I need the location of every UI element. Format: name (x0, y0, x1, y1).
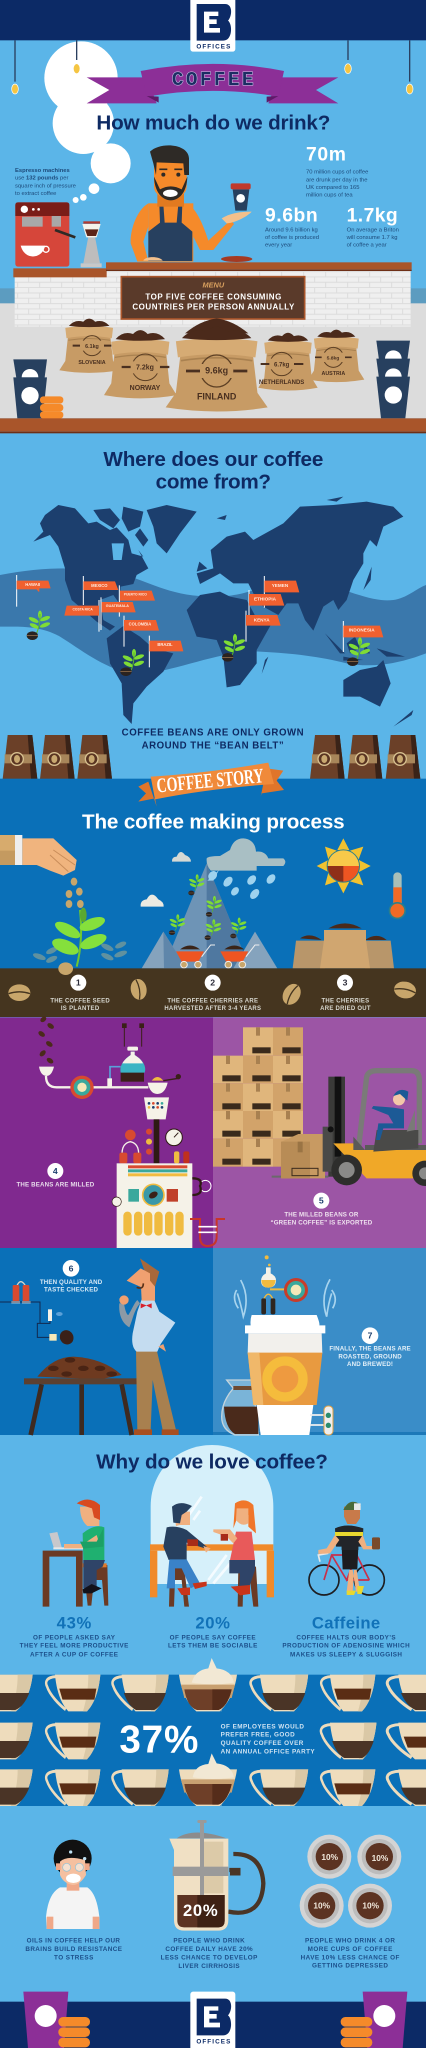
step 2: THE COFFEE CHERRIES ARE (167, 998, 258, 1004)
panel: steps 6 and 7 (0, 1248, 426, 1435)
flags (17, 575, 383, 667)
step 7: FINALLY, THE BEANS ARE (329, 1346, 411, 1353)
stat: 20%: LETS THEM BE SOCIABLE (168, 1643, 257, 1650)
panel background (0, 1017, 426, 1248)
fact: depression: MORE CUPS OF COFFEE (308, 1946, 392, 1953)
heading: where does our coffee (103, 448, 323, 493)
espresso fact: use 132 pounds per (15, 176, 69, 182)
stat: 37 percent: AN ANNUAL OFFICE PARTY (221, 1748, 315, 1755)
fact: depression: HAVE 10% LESS CHANCE OF (301, 1954, 399, 1961)
illustration: stressed person (46, 1840, 99, 1929)
flags: HAWAII (25, 582, 40, 587)
sack: netherlands (258, 333, 318, 391)
icon: taster man (119, 1258, 179, 1435)
fact: oils in coffee: TO STRESS (54, 1954, 93, 1961)
stat: 1.7kg: will consume 1.7 kg (346, 235, 398, 241)
stat: 1.7kg (346, 206, 399, 249)
stat: 37 percent: OF EMPLOYEES WOULD (221, 1723, 304, 1730)
icon: thermometer (389, 872, 406, 919)
cups row 1 (0, 1658, 426, 1711)
sack: norway: NORWAY (130, 385, 161, 392)
step 3: ARE DRIED OUT (320, 1006, 371, 1012)
stat: 9.6bn: 9.6bn (265, 206, 318, 227)
coffee bags (3, 735, 420, 779)
fact: liver cirrhosis: COFFEE DAILY HAVE 20% (165, 1946, 253, 1953)
icon: stacked boxes (213, 1027, 303, 1167)
step 3 (320, 975, 371, 1012)
step 6 (40, 1260, 103, 1294)
fact: liver cirrhosis: LIVER CIRRHOSIS (178, 1963, 240, 1970)
stat: 1.7kg: 1.7kg (347, 206, 398, 227)
footer bar (0, 2002, 426, 2048)
illustration: cyclist (309, 1502, 384, 1595)
icon: falling seeds (66, 878, 84, 908)
ribbon: coffee story (138, 763, 284, 807)
stat: caffeine: PRODUCTION OF ADENOSINE WHICH (282, 1643, 410, 1650)
caption: bean belt: AROUND THE “BEAN BELT” (142, 740, 284, 751)
sack: norway: 7.2kg (136, 364, 154, 371)
step 1: THE COFFEE SEED (50, 998, 110, 1004)
bean belt band (0, 568, 426, 674)
icon: hand planting (0, 835, 77, 876)
stat: 43%: OF PEOPLE ASKED SAY (33, 1634, 116, 1641)
icon: footer cup right (341, 1992, 407, 2048)
ribbon: coffee story: COFFEE STORY (156, 765, 265, 797)
step 6: THEN QUALITY AND (40, 1279, 103, 1286)
icon: sacks (293, 923, 394, 968)
panel: coffee story (0, 763, 426, 1017)
fact: depression: PEOPLE WHO DRINK 4 OR (305, 1938, 395, 1945)
flags: YEMEN (272, 583, 289, 588)
illustration: coffee cups from above: 10% (372, 1853, 389, 1863)
stat: 43%: AFTER A CUP OF COFFEE (30, 1651, 118, 1658)
soil strip with steps 1-3 (0, 962, 426, 1017)
step 7: AND BREWED! (347, 1361, 393, 1368)
icon: clouds and rain (141, 838, 285, 907)
icon: takeaway cups right (376, 341, 410, 418)
heading: why do we love coffee: Why do we love coffee? (96, 1450, 328, 1473)
panel: steps 4 and 5 (0, 1015, 426, 1248)
icon: tasting apparatus (0, 1282, 76, 1347)
sack: austria (308, 330, 364, 382)
stat: caffeine (282, 1613, 410, 1658)
step 2: 2 (210, 978, 215, 988)
panel background (0, 1248, 426, 1435)
sack: slovenia: SLOVENIA (78, 360, 106, 366)
sack: netherlands: 6.7kg (274, 362, 290, 368)
flags: BRAZIL (157, 642, 173, 647)
panel: where does our coffee come from (0, 448, 426, 779)
menu board (121, 277, 305, 319)
icon: sun (317, 838, 371, 893)
fact: depression: GETTING DEPRESSED (312, 1963, 388, 1970)
heading: the coffee making process: The coffee making process (82, 810, 345, 833)
icon: coffee pot (222, 1380, 258, 1435)
stat: 70m: are drunk per day in the (306, 177, 368, 183)
icon: forklift (272, 1071, 426, 1186)
icon: mountains with plants (142, 863, 277, 968)
thought cloud (44, 41, 131, 203)
icon: coffee plant (32, 908, 128, 976)
flags: GUATEMALA (106, 604, 129, 608)
sack: netherlands: NETHERLANDS (259, 380, 304, 386)
step 5 (270, 1193, 373, 1226)
band background (0, 1675, 426, 1806)
heading: where does our coffee: come from? (156, 470, 271, 493)
step 7 (329, 1327, 411, 1368)
icon: takeaway cup (245, 1315, 333, 1435)
icon: grinder (81, 221, 102, 267)
menu board: COUNTRIES PER PERSON ANNUALLY (132, 303, 295, 312)
fact: liver cirrhosis: LESS CHANCE TO DEVELOP (161, 1955, 257, 1962)
step 4: THE BEANS ARE MILLED (16, 1182, 95, 1189)
illustration: french press (169, 1820, 263, 1931)
stat: 9.6bn: of coffee is produced (265, 235, 319, 241)
stat: 37 percent: PREFER FREE, GOOD (221, 1732, 295, 1739)
stat: 70m: 70m (306, 145, 346, 166)
stat: 9.6bn (265, 206, 319, 249)
sack: finland: 9.6kg (205, 366, 228, 376)
stat: 20%: OF PEOPLE SAY COFFEE (170, 1634, 256, 1641)
fact: oils in coffee (25, 1938, 122, 1961)
stat: caffeine: Caffeine (312, 1613, 380, 1632)
flags: ETHIOPIA (254, 596, 277, 601)
window reflections (187, 1497, 232, 1583)
sack: slovenia: 6.1kg (85, 344, 99, 350)
stat: 1.7kg: On average a Briton (347, 228, 399, 234)
fact: liver cirrhosis (161, 1938, 257, 1970)
illustration: man at laptop (43, 1500, 108, 1607)
stat: 20%: 20% (195, 1613, 230, 1632)
step 4 (16, 1163, 95, 1189)
stat: 9.6bn: Around 9.6 billion kg (265, 227, 318, 233)
sack: slovenia (59, 319, 119, 373)
logo: OFFICES (196, 44, 230, 51)
icon: carts (176, 945, 259, 968)
floor counter (0, 418, 426, 433)
icon: footer cup left (23, 1992, 90, 2048)
step 6: 6 (69, 1263, 74, 1273)
icon: milling machine (39, 1023, 225, 1248)
sack: finland: FINLAND (197, 392, 237, 402)
flags: INDONESIA (349, 628, 375, 633)
panel: how much do we drink (0, 0, 426, 433)
fact: oils in coffee: OILS IN COFFEE HELP OUR (27, 1938, 120, 1945)
espresso fact: to extract coffee (15, 191, 56, 197)
espresso fact (15, 168, 76, 197)
header bar (0, 0, 426, 40)
floor and wall band (0, 288, 426, 418)
panel: why do we love coffee (20, 1445, 410, 1658)
flags: COSTA RICA (72, 607, 93, 611)
stat: 37 percent (119, 1719, 315, 1762)
step 5: “GREEN COFFEE” IS EXPORTED (270, 1219, 373, 1226)
stat: caffeine: COFFEE HALTS OUR BODY’S (296, 1634, 396, 1641)
flags: COLOMBIA (129, 621, 151, 626)
cups row 2 (0, 1723, 426, 1759)
step 1 (50, 975, 110, 1012)
sack: finland (166, 318, 268, 411)
illustration: coffee cups from above: 10% (313, 1900, 331, 1910)
fact: oils in coffee: BRAINS BUILD RESISTANCE (25, 1946, 122, 1953)
step 3: 3 (343, 978, 348, 988)
panel background (0, 779, 426, 969)
shelf and counter (13, 256, 412, 327)
step 2 (164, 975, 261, 1012)
icon: flask and dial (261, 1255, 308, 1314)
sack: austria: AUSTRIA (321, 371, 345, 377)
stat: 20% (168, 1613, 257, 1650)
stat: 37 percent: QUALITY COFFEE OVER (221, 1740, 304, 1747)
footer logo: OFFICES (196, 2039, 230, 2046)
icon: biscuits (40, 396, 63, 419)
icon: espresso machine (15, 202, 75, 267)
illustration: french press: 20% (183, 1901, 218, 1920)
step 6: TASTE CHECKED (44, 1287, 99, 1294)
illustration: coffee cups from above (300, 1835, 401, 1928)
coffee plants (27, 611, 371, 676)
sack: norway (104, 330, 177, 398)
espresso fact: Espresso machines (15, 168, 70, 174)
stat: 70m (306, 145, 368, 199)
stat: 43%: 43% (57, 1613, 92, 1632)
ribbon banner: coffee: COFFEE (172, 69, 253, 91)
step 4: 4 (53, 1166, 58, 1176)
stat: caffeine: MAKES US SLEEPY & SLUGGISH (290, 1651, 402, 1658)
icon: falling beans (37, 1015, 55, 1065)
espresso fact: square inch of pressure (15, 183, 76, 189)
step 5: THE MILLED BEANS OR (284, 1212, 359, 1219)
step 2: HARVESTED AFTER 3-4 YEARS (164, 1006, 261, 1012)
step 5: 5 (319, 1196, 324, 1206)
panel: 37 percent cups band (0, 1658, 426, 2048)
logo (190, 0, 235, 52)
step 1: 1 (76, 978, 81, 988)
ribbon banner: coffee (87, 64, 338, 103)
icon: takeaway cups left (13, 359, 47, 418)
icon: steam (235, 1279, 335, 1317)
flags: MEXICO (91, 583, 108, 588)
hanging lamps (15, 40, 410, 82)
illustration: coffee cups from above: 10% (362, 1900, 380, 1910)
illustration: couple at table (150, 1500, 274, 1607)
stat: 37 percent: 37% (119, 1719, 198, 1762)
flags: KENYA (254, 617, 270, 622)
caption: bean belt (122, 728, 304, 751)
menu board: TOP FIVE COFFEE CONSUMING (145, 292, 281, 301)
step 1: IS PLANTED (61, 1006, 100, 1012)
stat: 70m: million cups of tea (306, 193, 353, 199)
stat: 9.6bn: every year (265, 243, 292, 249)
fact: liver cirrhosis: PEOPLE WHO DRINK (173, 1938, 245, 1945)
stat: 43%: THEY FEEL MORE PRODUCTIVE (20, 1643, 128, 1650)
sack: austria: 5.8kg (327, 355, 339, 361)
world map (33, 497, 413, 727)
footer logo (190, 1992, 235, 2048)
illustration: coffee cups from above: 10% (321, 1852, 339, 1862)
stat: 70m: UK compared to 165 (306, 185, 359, 191)
cups row 3 (0, 1753, 426, 1806)
heading: where does our coffee: Where does our coffee (103, 448, 323, 471)
window arch (151, 1445, 273, 1584)
icon: barista (131, 145, 252, 262)
stat: 43% (20, 1613, 128, 1658)
heading: how much do we drink: How much do we drink? (96, 111, 330, 134)
menu board: MENU (203, 280, 225, 289)
step 7: ROASTED, GROUND (338, 1353, 402, 1360)
flags: PUERTO RICO (124, 593, 147, 597)
caption: bean belt: COFFEE BEANS ARE ONLY GROWN (122, 728, 304, 739)
icon: beans table (24, 1357, 140, 1435)
step 3: THE CHERRIES (321, 998, 369, 1004)
step 7: 7 (368, 1331, 373, 1341)
stat: 70m: 70 million cups of coffee (306, 170, 368, 176)
stat: 1.7kg: of coffee a year (347, 243, 387, 249)
fact: depression (301, 1938, 399, 1970)
